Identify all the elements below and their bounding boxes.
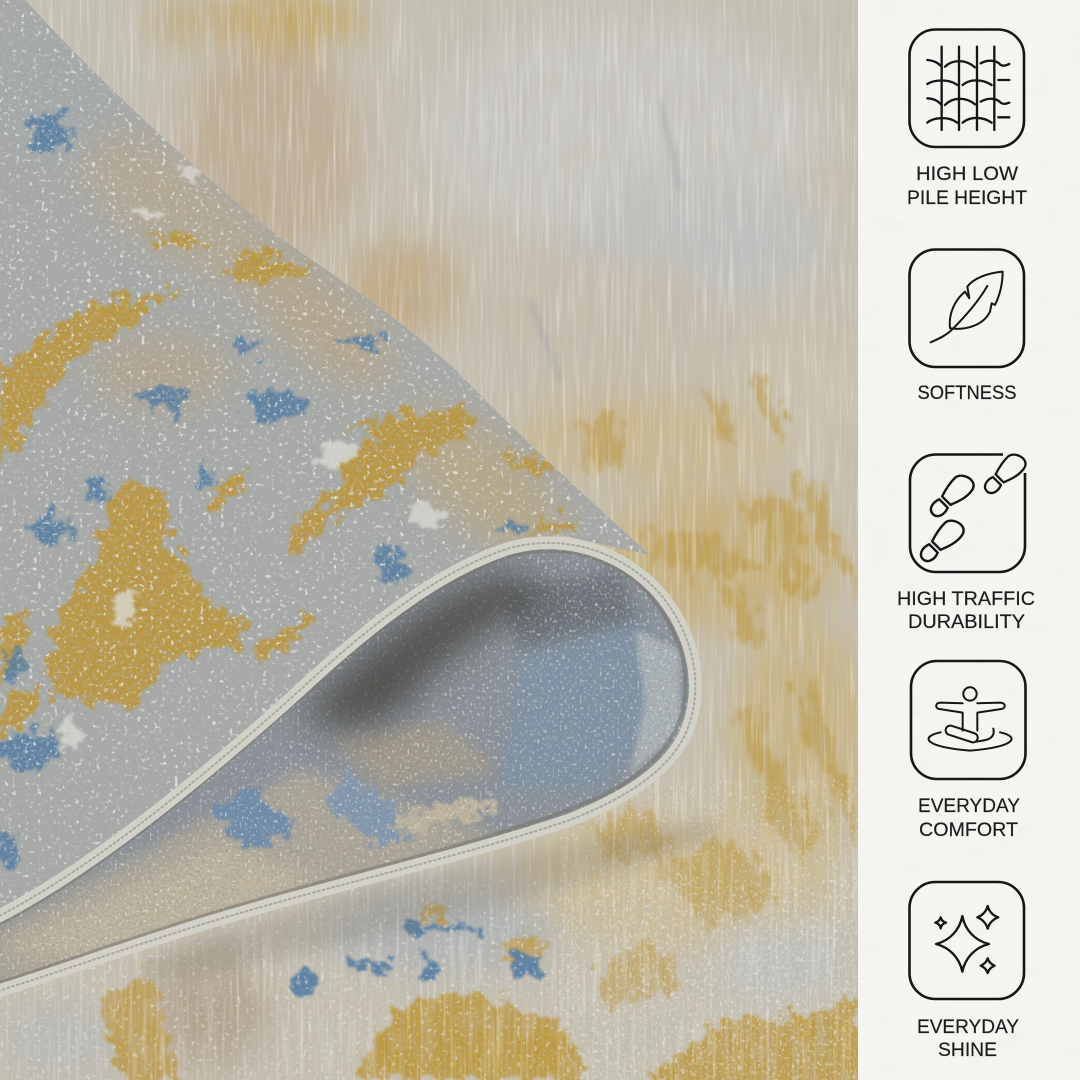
photo: rug edge binding xyxy=(0,543,695,992)
feature: everyday comfort xyxy=(911,661,1026,841)
icon: footprints xyxy=(916,450,1029,567)
photo: rolled rug top surface xyxy=(0,0,700,930)
feature: softness xyxy=(910,250,1024,404)
icon: pile fibres xyxy=(927,47,1009,130)
label: high traffic durability: DURABILITY xyxy=(908,612,1025,633)
label: high low pile height: PILE HEIGHT xyxy=(907,188,1027,209)
label: high traffic durability: HIGH TRAFFIC xyxy=(897,589,1035,610)
icon: seated person on rug xyxy=(929,687,1012,751)
icon: feather xyxy=(931,272,1003,342)
feature: everyday shine xyxy=(910,882,1024,1061)
icon: sparkles xyxy=(935,906,998,973)
label: everyday shine: EVERYDAY xyxy=(917,1017,1019,1038)
label: everyday comfort: EVERYDAY xyxy=(918,796,1020,817)
label: everyday comfort: COMFORT xyxy=(919,820,1018,841)
label: high low pile height: HIGH LOW xyxy=(916,164,1018,185)
label: softness: SOFTNESS xyxy=(918,383,1016,404)
panel: features sidebar xyxy=(858,0,1080,1080)
feature: high traffic durability xyxy=(897,450,1035,633)
photo: rug underside inside the curl xyxy=(0,549,689,984)
label: everyday shine: SHINE xyxy=(938,1040,997,1061)
feature: high low pile height xyxy=(907,30,1027,209)
